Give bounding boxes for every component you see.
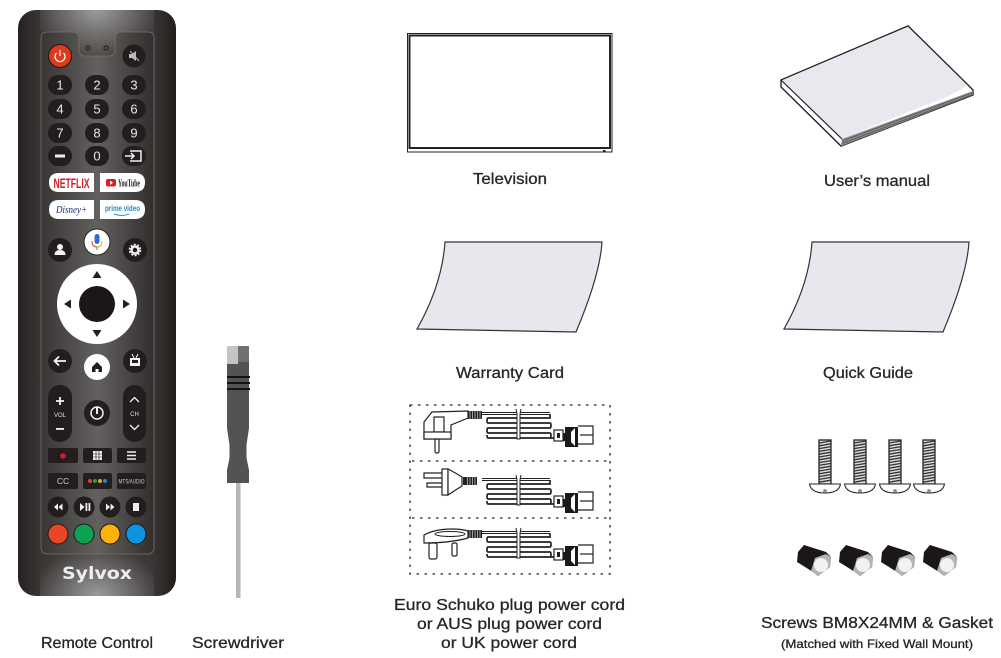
prime video button — [100, 200, 145, 219]
settings button — [123, 238, 147, 262]
volume rocker — [48, 385, 72, 442]
user's manual — [781, 26, 973, 146]
number keys: 7 — [56, 126, 64, 140]
remote control — [18, 10, 176, 596]
disney plus button: Disney+ — [55, 204, 87, 216]
number keys: 4 — [56, 102, 64, 116]
dotted frame — [410, 405, 610, 574]
prime video button: prime video — [105, 204, 140, 213]
volume rocker: VOL — [54, 413, 67, 419]
home button — [84, 354, 110, 380]
youtube button — [100, 173, 145, 192]
microphone button — [84, 229, 110, 255]
tv button — [123, 349, 147, 373]
label: power cords — [394, 597, 625, 652]
label: user's manual: User’s manual — [824, 173, 930, 190]
television — [408, 34, 612, 152]
sensor dots — [86, 46, 108, 50]
directional pad — [57, 264, 137, 344]
aus plug cord — [424, 469, 593, 513]
number keys: 8 — [93, 126, 101, 140]
remote body — [18, 10, 176, 596]
back button — [48, 349, 72, 373]
number keys: 9 — [130, 126, 138, 140]
disney plus button — [49, 200, 94, 219]
number keys: 6 — [130, 102, 138, 116]
euro schuko plug cord — [424, 409, 593, 453]
screws — [810, 440, 944, 493]
mute button — [122, 44, 146, 68]
label: power cords: Euro Schuko plug power cord — [394, 597, 625, 614]
quick guide — [784, 242, 969, 332]
power cords — [410, 405, 610, 574]
warranty card — [417, 242, 602, 332]
function key row — [48, 448, 146, 463]
netflix button — [49, 173, 94, 192]
number keys: 1 — [56, 78, 64, 92]
screwdriver — [227, 346, 250, 598]
number keys: 5 — [93, 102, 101, 116]
label: power cords: or UK power cord — [441, 635, 577, 652]
inner button panel — [41, 32, 154, 554]
channel rocker — [123, 385, 146, 442]
uk plug cord — [424, 528, 593, 566]
number keys — [48, 75, 146, 166]
number keys: 3 — [130, 78, 138, 92]
cc, dots and audio keys — [48, 473, 146, 489]
power button — [48, 44, 72, 68]
color keys — [48, 524, 146, 544]
label: television: Television — [473, 171, 547, 188]
center power button — [84, 400, 110, 426]
label: warranty card: Warranty Card — [456, 365, 564, 382]
label: power cords: or AUS plug power cord — [417, 616, 602, 633]
youtube button: YouTube — [118, 178, 140, 190]
label: quick guide: Quick Guide — [823, 365, 913, 382]
label: screws and gasket: Screws BM8X24MM & Gasket — [761, 615, 994, 632]
brand logo: Sylvox — [62, 564, 132, 584]
label: remote control: Remote Control — [41, 635, 153, 652]
netflix button: NETFLIX — [54, 175, 90, 191]
cc, dots and audio keys: CC — [57, 476, 69, 486]
media keys — [48, 496, 146, 518]
profile button — [48, 238, 72, 262]
gaskets — [797, 545, 957, 576]
channel rocker: CH — [130, 412, 139, 418]
number keys: 2 — [93, 78, 101, 92]
label: wall mount note: (Matched with Fixed Wall Mount) — [781, 637, 973, 651]
cc, dots and audio keys: MTS/AUDIO — [118, 478, 144, 486]
label: screwdriver: Screwdriver — [192, 635, 285, 652]
number keys: 0 — [93, 148, 101, 164]
